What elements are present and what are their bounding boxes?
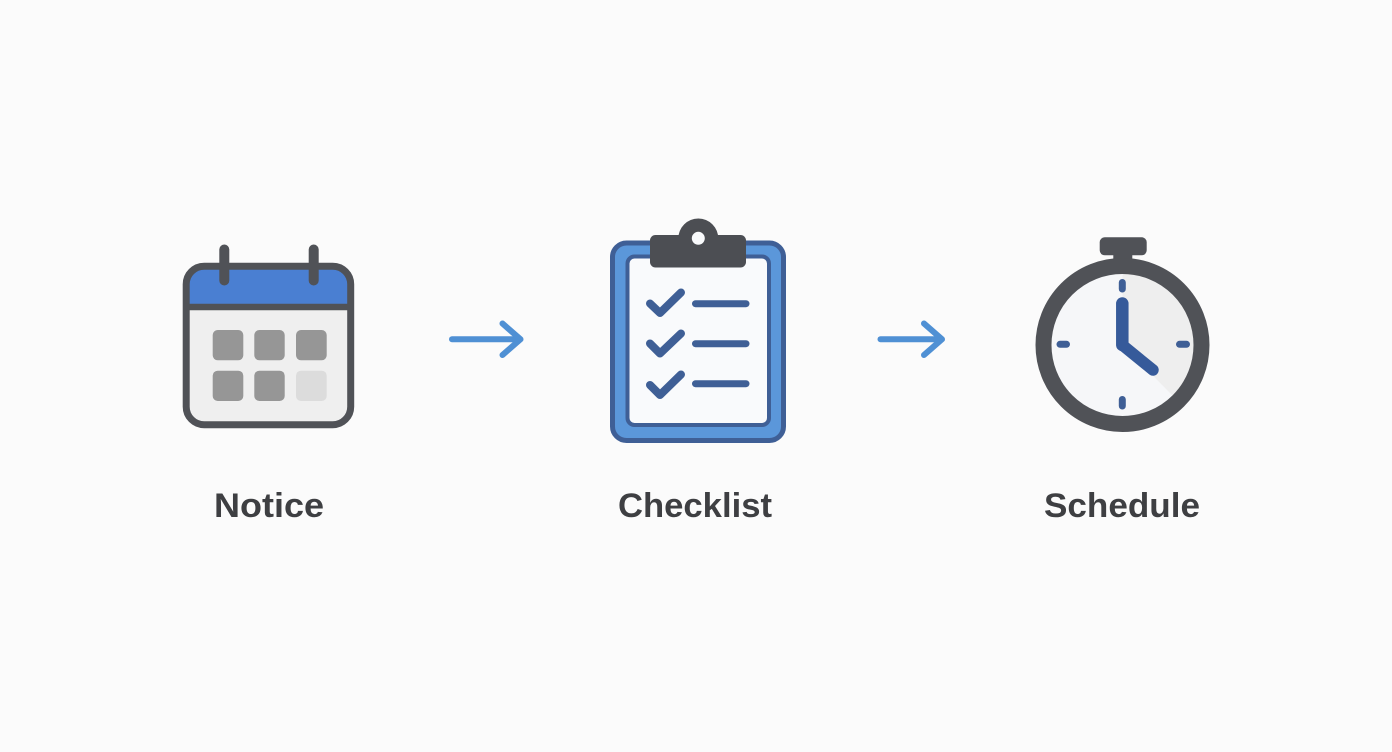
stopwatch ring (1044, 266, 1202, 424)
stopwatch face shading (1122, 273, 1194, 396)
checklist ticks (650, 292, 681, 395)
calendar binding pins (224, 250, 314, 280)
arrow: notice to checklist (452, 324, 520, 355)
checklist lines (696, 304, 746, 384)
icon: calendar (186, 250, 351, 425)
stopwatch face (1050, 273, 1194, 417)
clipboard paper (628, 256, 769, 425)
icon: clipboard checklist (612, 218, 784, 440)
stopwatch button (1100, 237, 1147, 255)
calendar outline (186, 266, 351, 425)
label: Notice: Notice (214, 487, 324, 525)
calendar header divider (186, 304, 351, 310)
label: Checklist: Checklist (618, 487, 772, 525)
icon: stopwatch (1044, 237, 1202, 424)
clipboard clip (650, 218, 746, 268)
label: Schedule: Schedule (1044, 487, 1200, 525)
stopwatch stem (1113, 250, 1132, 264)
stopwatch ticks (1060, 282, 1186, 406)
calendar date squares (213, 330, 327, 401)
arrow: checklist to schedule (880, 324, 942, 355)
clipboard board (612, 243, 784, 440)
calendar blue header (186, 266, 351, 307)
stopwatch hands (1122, 304, 1153, 370)
calendar body (186, 266, 351, 425)
